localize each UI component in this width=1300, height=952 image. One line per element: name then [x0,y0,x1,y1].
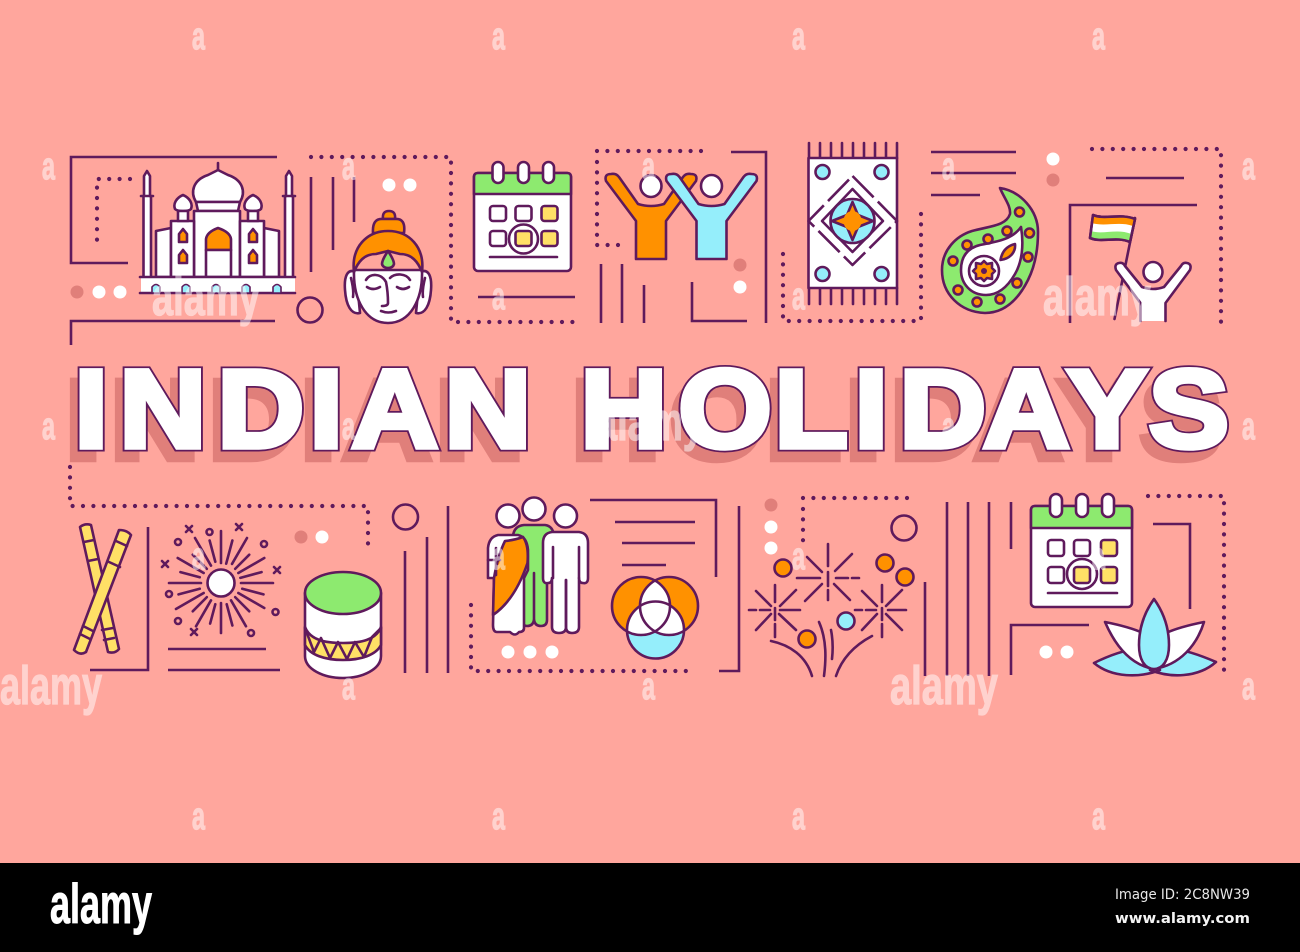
footer bar [0,863,1300,952]
watermark: repeated alamy marks: alamy [0,656,102,716]
watermark: repeated alamy marks: alamy [596,392,704,452]
footer url: www.alamy.com [1115,911,1250,927]
icon: lotus flower [1094,599,1216,675]
watermark: repeated alamy marks: a [492,536,506,578]
icon: two celebrating people [606,174,757,259]
decor: dotted frame and lines around Buddha [298,157,576,322]
watermark: repeated alamy marks: a [792,16,806,58]
watermark: repeated alamy marks: a [1092,16,1106,58]
decor: top-left frames and dots [70,157,277,345]
watermark: repeated alamy marks: a [42,146,56,188]
watermark: repeated alamy marks: a [1242,406,1256,448]
decor: dotted frame around carpet and paisley lines [783,152,1060,321]
icon: Buddha head [345,211,431,323]
icon: venn diagram [612,577,698,658]
icon: sunburst firework [162,524,280,636]
icon: patterned carpet [808,143,897,304]
decor: lines around the family [471,500,739,671]
footer image id: Image ID: 2C8NW39 [1115,887,1250,903]
icon: fireworks [749,544,914,676]
watermark: repeated alamy marks: alamy [152,267,260,327]
watermark: repeated alamy marks: a [342,146,356,188]
watermark: repeated alamy marks: a [492,796,506,838]
watermark: repeated alamy marks: a [642,146,656,188]
watermark: repeated alamy marks: a [792,796,806,838]
watermark: repeated alamy marks: a [642,666,656,708]
watermark: repeated alamy marks: a [492,16,506,58]
watermark: repeated alamy marks: a [1092,796,1106,838]
icon: calendar [474,162,571,271]
icon: calendar 2 [1031,494,1132,607]
watermark: repeated alamy marks: a [342,666,356,708]
title: INDIAN HOLIDAYS [74,349,1229,471]
decor: lines and dots near fireworks [764,496,1224,678]
watermark: repeated alamy marks: a [42,406,56,448]
watermark: repeated alamy marks: a [1092,536,1106,578]
watermark: repeated alamy marks: a [792,276,806,318]
watermark: repeated alamy marks: alamy [890,656,998,716]
decor: lower-left frames [70,467,448,673]
watermark: repeated alamy marks: a [792,536,806,578]
icon: person with Indian flag [1090,215,1191,321]
watermark: repeated alamy marks: a [942,406,956,448]
decor: frames around flag person [1070,149,1221,323]
watermark: repeated alamy marks: a [1242,146,1256,188]
watermark: repeated alamy marks: a [192,536,206,578]
title: INDIAN HOLIDAYS [66,360,1221,482]
watermark: repeated alamy marks: a [192,16,206,58]
icon: paisley [942,188,1038,313]
icon: family in traditional dress [488,498,588,634]
title: INDIAN HOLIDAYS [74,349,1229,471]
watermark: repeated alamy marks: alamy [1043,267,1151,327]
watermark: repeated alamy marks: a [492,276,506,318]
watermark: repeated alamy marks: a [342,406,356,448]
icon: Taj Mahal [140,163,295,293]
icon: dandiya sticks [74,524,131,654]
decor: lines around the celebrating people [597,151,766,323]
watermark: repeated alamy marks: a [1242,666,1256,708]
watermark: repeated alamy marks: a [942,146,956,188]
icon: drum [305,572,381,678]
watermark: repeated alamy marks: a [192,796,206,838]
footer logo: alamy [50,872,152,935]
